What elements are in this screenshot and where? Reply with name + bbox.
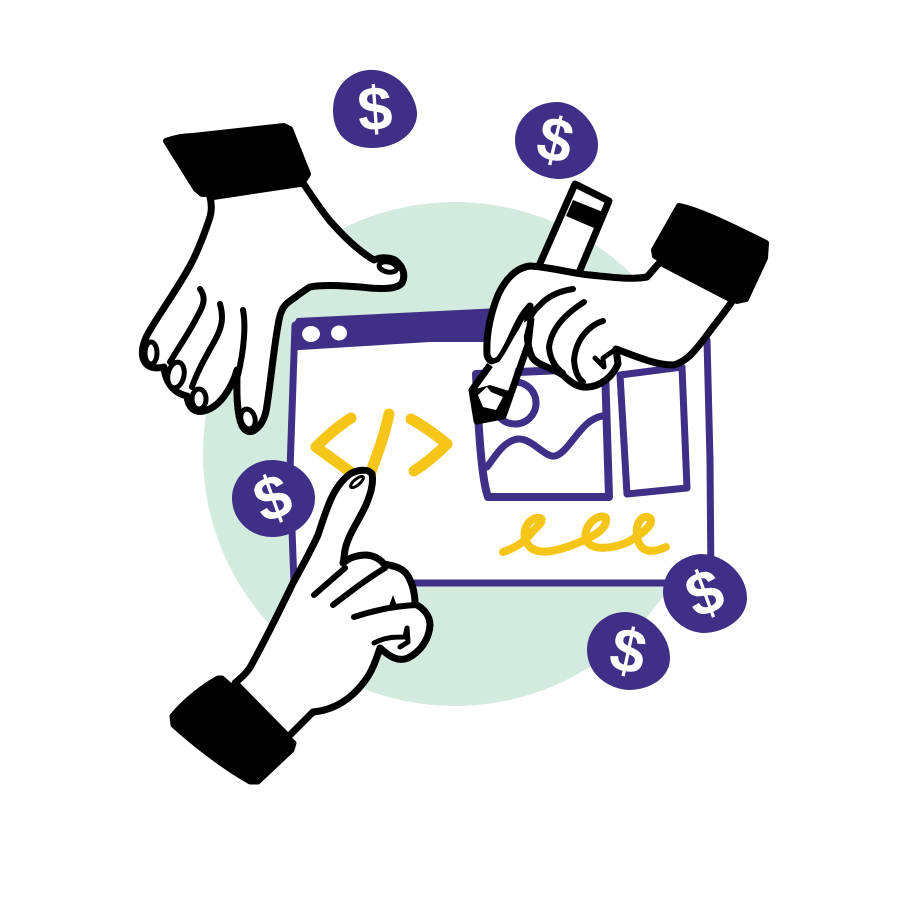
fingernails (145, 260, 398, 430)
dollar coin top left (333, 70, 417, 148)
pencil tip (472, 318, 531, 421)
dollar coin bottom (587, 612, 670, 690)
dollar coin lower right: $ (677, 555, 733, 632)
bottom hand (172, 470, 430, 782)
code symbol (316, 414, 447, 482)
dollar coin top right (515, 102, 598, 179)
image card (476, 368, 609, 497)
cuff (166, 126, 308, 194)
sidebar card (620, 367, 687, 494)
background circle (203, 202, 707, 706)
dollar coin bottom: $ (604, 614, 652, 689)
dollar coin top right: $ (531, 103, 580, 178)
window dots (302, 326, 347, 342)
browser window (290, 308, 711, 583)
dollar coin top left: $ (355, 74, 395, 145)
dollar coin left (232, 460, 315, 537)
dollar coin lower right (663, 554, 747, 633)
pencil top (538, 184, 609, 275)
right hand (472, 206, 766, 421)
dollar coin left: $ (245, 460, 301, 537)
fingernail (349, 475, 365, 489)
yellow squiggle (503, 517, 666, 552)
cuff (172, 678, 294, 782)
top left hand (142, 126, 404, 432)
cuff (654, 206, 766, 301)
